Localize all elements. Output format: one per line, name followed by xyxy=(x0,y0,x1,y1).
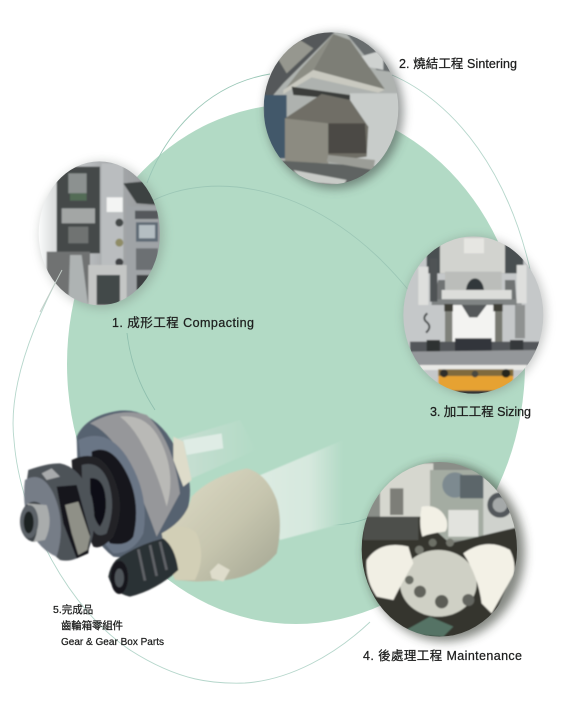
label: maintenance: 4. 後處理工程 Maintenance xyxy=(363,649,522,663)
outer thin line: top left xyxy=(147,74,270,183)
gear cage xyxy=(25,463,94,561)
label: finished product: 5.完成品 xyxy=(53,603,93,616)
outer thin line: top right xyxy=(392,75,536,300)
black rings xyxy=(72,456,120,547)
label: finished product: 齒輪箱零組件 xyxy=(61,619,123,632)
photo: maintenance xyxy=(360,460,525,641)
label: finished product xyxy=(53,603,164,648)
ghost tube lower xyxy=(257,440,343,540)
black nozzle xyxy=(108,538,178,597)
plastic body xyxy=(162,468,280,582)
overlay line across compacting photo xyxy=(40,270,62,312)
bearing housing xyxy=(77,410,190,557)
label: sintering: 2. 燒結工程 Sintering xyxy=(399,57,517,71)
output shaft xyxy=(20,502,48,542)
label: compacting: 1. 成形工程 Compacting xyxy=(112,316,254,330)
photo: compacting xyxy=(37,160,164,309)
inner thin line: top arc xyxy=(150,186,410,292)
tube upper xyxy=(173,420,257,478)
green central ellipse xyxy=(67,104,525,624)
label: sizing: 3. 加工工程 Sizing xyxy=(430,405,531,419)
outer thin line: left and bottom xyxy=(13,270,370,683)
photo: sintering xyxy=(260,30,403,190)
gear and gear box parts xyxy=(20,410,343,597)
label: finished product: Gear & Gear Box Parts xyxy=(61,637,164,648)
white collar xyxy=(173,437,192,487)
inner thin line: lower segment xyxy=(330,518,368,525)
inner thin line: left segment xyxy=(127,333,155,410)
photo: sizing xyxy=(400,233,547,397)
